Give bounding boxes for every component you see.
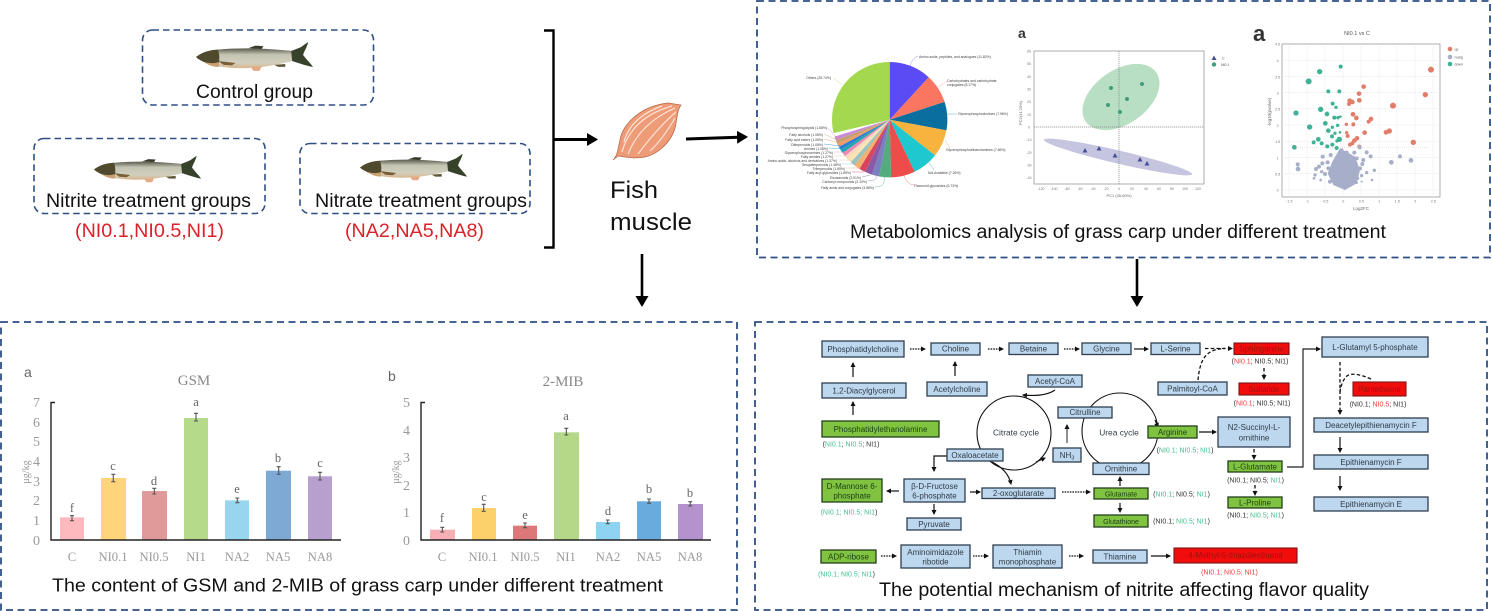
- citrate cycle: [977, 396, 1051, 470]
- box: N2-Succinyl-L-ornithine: N2-Succinyl-L-: [1228, 423, 1281, 432]
- arrow: metabolomics to mechanism: [1136, 259, 1138, 305]
- bar chart: 2-MIB: μg/kg: [391, 460, 402, 484]
- bar chart: 2-MIB: [388, 368, 711, 564]
- volcano plot: 0: [1277, 189, 1279, 193]
- box: Choline: [931, 343, 980, 355]
- PCA scatter plot: -60: [1077, 187, 1083, 191]
- bar chart: GSM: NA5: [266, 550, 290, 564]
- volcano plot: 2: [1414, 199, 1416, 203]
- bar chart: 2-MIB: NA8: [678, 550, 702, 564]
- PCA scatter plot: -100: [1050, 187, 1058, 191]
- chart title GSM: GSM: [178, 373, 210, 389]
- volcano plot: 1: [1378, 199, 1380, 203]
- pie labels: Glycerophosphoserines (1.27%): [785, 151, 833, 155]
- box: Sulfatide: [1239, 383, 1289, 395]
- label: Pantetheine groups: (NI0.1; NI0.5; NI1): [1350, 402, 1406, 408]
- box: Acetylcholine: [927, 382, 987, 396]
- PCA scatter plot: -20: [1026, 151, 1032, 155]
- bar chart: GSM: e: [234, 482, 240, 496]
- arrow: muscle to metabolomics: [686, 137, 746, 139]
- bar chart: GSM: NA2: [225, 550, 249, 564]
- box: L-Proline: L-Proline: [1239, 498, 1272, 508]
- pie labels: Sesquiterpenoids (1.48%): [802, 163, 841, 167]
- volcano legend: down: [1454, 62, 1463, 66]
- box: Glutathione: [1094, 515, 1148, 527]
- box: L-Proline: [1228, 497, 1282, 508]
- bar chart: GSM: c: [110, 459, 116, 473]
- label: Glutamate groups: (NI0.1; NI0.5; NI1): [1153, 492, 1210, 498]
- pie labels: Flavonoid glycosides (6.73%): [914, 184, 958, 188]
- bar chart: 2-MIB: f: [440, 511, 445, 525]
- label: D-Mannose groups: (NI0.1; NI0.5; NI1): [821, 510, 877, 516]
- PCA scatter plot: -40: [1090, 187, 1096, 191]
- box: 1,2-Diacylglycerol: 1,2-Diacylglycerol: [832, 386, 896, 396]
- box: Glutamate: [1094, 488, 1148, 499]
- volcano plot: 1: [1277, 156, 1279, 160]
- volcano plot: 0.5: [1275, 173, 1280, 177]
- box: L-Glutamyl 5-phosphate: L-Glutamyl 5-phosphate: [1332, 343, 1418, 352]
- label: ADP-ribose groups: (NI0.1; NI0.5; NI1): [818, 572, 875, 578]
- box: Deacetylepithienamycin F: Deacetylepithienamycin F: [1325, 421, 1417, 430]
- box: L-Glutamate: L-Glutamate: [1233, 462, 1278, 472]
- label: L-Proline groups: (NI0.1; NI0.5; NI1): [1227, 512, 1284, 520]
- box: D-Mannose 6-phosphate: phosphate: [833, 492, 871, 500]
- panel: nitrate treatment groups: [300, 144, 530, 214]
- pie labels: Fatty amides (1.27%): [801, 155, 833, 159]
- volcano plot: 1.5: [1395, 199, 1400, 203]
- box: Pyruvate: [907, 518, 961, 530]
- box: L-Glutamate: [1228, 461, 1282, 472]
- PCA scatter plot: 10: [1027, 113, 1031, 117]
- box: L-Serine: L-Serine: [1160, 344, 1191, 354]
- bar chart: 2-MIB: d: [605, 504, 612, 518]
- PCA scatter plot: -120: [1037, 187, 1045, 191]
- bar chart: GSM: a: [193, 395, 199, 409]
- volcano legend: nosig: [1454, 56, 1463, 60]
- bar chart: GSM: b: [275, 451, 281, 465]
- box: D-Mannose 6-phosphate: [822, 479, 882, 502]
- urea cycle: Urea cycle: [1099, 428, 1139, 438]
- box: Arginine: [1148, 426, 1197, 438]
- volcano plot: 4: [1277, 59, 1279, 63]
- icon: nitrate fish: [360, 154, 467, 180]
- PCA scatter plot: -80: [1064, 187, 1070, 191]
- PCA legend: NI0.1: [1221, 63, 1229, 67]
- label: Arginine groups: (NI0.1; NI0.5; NI1): [1157, 448, 1213, 454]
- box: Epithienamycin F: [1314, 455, 1428, 469]
- PCA scatter plot: 40: [1144, 187, 1148, 191]
- bar chart: 2-MIB: C: [438, 550, 446, 564]
- bar chart: 2-MIB: b: [687, 486, 693, 500]
- bar chart: GSM: 7: [33, 396, 40, 411]
- bar chart: GSM: C: [68, 550, 76, 564]
- chart title 2-MIB: 2-MIB: [543, 374, 583, 390]
- volcano plot: -1.5: [1286, 199, 1292, 203]
- pie labels: Triterpenoids (1.65%): [813, 167, 845, 171]
- panel: control group: [142, 30, 374, 105]
- pie labels: Amines (1.08%): [804, 147, 828, 151]
- PCA scatter plot: 60: [1157, 187, 1161, 191]
- box: Citrulline: [1058, 407, 1112, 418]
- bar chart: 2-MIB: NI0.1: [468, 550, 498, 564]
- pie chart: [824, 56, 957, 187]
- bar chart: 2-MIB: 2: [403, 479, 410, 494]
- volcano plot: 2.5: [1431, 199, 1436, 203]
- bar chart: 2-MIB: NI0.5: [510, 550, 540, 564]
- bar chart: GSM: 3: [33, 475, 40, 490]
- volcano plot: -log10(pvalue): [1267, 97, 1272, 126]
- pie labels: Amino acids, peptides, and analogues (11.82%): [919, 55, 991, 59]
- bar chart: GSM: d: [151, 474, 158, 488]
- bar chart: 2-MIB: 4: [403, 424, 410, 439]
- box: Ornithine: [1093, 463, 1149, 474]
- PCA scatter plot: 50: [1027, 62, 1031, 66]
- box: D-Mannose 6-phosphate: D-Mannose 6-: [827, 482, 878, 491]
- pie labels: Phosphosphingolipids (1.68%): [781, 126, 827, 130]
- box: Aminoimidazole ribotide: ribotide: [922, 558, 949, 566]
- panel: GSM and 2-MIB content: [1, 322, 737, 610]
- bar chart: GSM: NA8: [308, 550, 332, 564]
- bar chart: GSM: NI0.5: [139, 550, 169, 564]
- pie labels: Diterpenoids (1.08%): [791, 143, 823, 147]
- panel: nitrite treatment groups: [34, 138, 265, 214]
- box: Aminoimidazole ribotide: Aminoimidazole: [907, 548, 964, 557]
- bar chart: GSM: NI1: [186, 550, 206, 564]
- bar chart: 2-MIB: 3: [403, 451, 410, 466]
- box: Thiamin monophosphate: monophosphate: [999, 558, 1057, 566]
- panel: potential mechanism: [755, 322, 1487, 610]
- volcano plot: Log2FC: [1353, 206, 1370, 211]
- box: Aminoimidazole ribotide: [901, 545, 970, 568]
- bar chart: GSM: c: [317, 456, 323, 470]
- box: Epithienamycin E: [1314, 497, 1428, 511]
- label: nitrite groups: Nitrite treatment groups: [46, 191, 251, 212]
- volcano plot: 3: [1277, 91, 1279, 95]
- label: 4-Methyl groups: (NI0.1; NI0.5; NI1): [1201, 570, 1258, 576]
- box: ADP-ribose: ADP-ribose: [828, 552, 870, 562]
- pathway arrows: [853, 348, 1371, 556]
- bracket: [544, 30, 554, 248]
- PCA scatter plot: PC1 (35.60%): [1106, 193, 1132, 198]
- label: fish muscle: muscle: [610, 209, 692, 236]
- bar chart: GSM: NI0.1: [98, 550, 128, 564]
- box: Phosphatidylethanolamine: Phosphatidylethanolamine: [834, 425, 928, 434]
- box: Glycine: [1082, 343, 1131, 354]
- PCA scatter plot: 40: [1027, 75, 1031, 79]
- bar chart: GSM: 4: [33, 455, 40, 470]
- volcano plot: 4.5: [1275, 43, 1280, 47]
- pie labels: Fatty alcohols (1.08%): [789, 133, 823, 137]
- box: NH3: 3: [1071, 456, 1074, 462]
- box: Sphinganine: [1234, 343, 1289, 354]
- box: Epithienamycin E: Epithienamycin E: [1340, 500, 1402, 509]
- PCA scatter plot: 20: [1130, 187, 1134, 191]
- bar chart: 2-MIB: b: [646, 482, 652, 496]
- box: Thiamin monophosphate: [993, 545, 1062, 568]
- box: Sphinganine: Sphinganine: [1239, 344, 1284, 354]
- box: 2-oxoglutarate: 2-oxoglutarate: [993, 489, 1045, 498]
- PCA legend: C: [1222, 56, 1225, 60]
- box: 4-Methyl-5-thiazoleethanol: 4-Methyl-5-thiazoleethanol: [1188, 551, 1283, 560]
- bar chart: 2-MIB: NI1: [556, 550, 576, 564]
- volcano plot: 0: [1342, 199, 1344, 203]
- volcano plot: -0.5: [1322, 199, 1328, 203]
- volcano plot: 2.5: [1275, 108, 1280, 112]
- bar chart: GSM: 2: [33, 494, 40, 509]
- box: Deacetylepithienamycin F: [1314, 418, 1428, 432]
- box: beta-D-Fructose 6-phosphate: [904, 479, 965, 502]
- box: L-Glutamyl 5-phosphate: [1322, 337, 1428, 357]
- pie labels: Glycerophosphocholines (7.96%): [958, 112, 1008, 116]
- panel letter a: a: [24, 364, 32, 380]
- pie labels: [768, 55, 1008, 190]
- volcano plot: [1253, 21, 1463, 211]
- label: L-Glutamate groups: (NI0.1; NI0.5; NI1): [1227, 478, 1284, 484]
- pie labels: Carbonyl compounds (2.10%): [822, 180, 867, 184]
- box: ADP-ribose: [821, 550, 876, 563]
- volcano plot: 3.5: [1275, 75, 1280, 79]
- box: Glycine: Glycine: [1093, 344, 1120, 354]
- volcano plot: -1: [1306, 199, 1309, 203]
- label: fish muscle: Fish: [610, 177, 658, 204]
- label: Sphinganine groups: (NI0.1; NI0.5; NI1): [1232, 358, 1288, 366]
- pie labels: Fatty acid esters (1.08%): [785, 138, 823, 142]
- label: nitrate groups: Nitrate treatment groups: [315, 191, 527, 212]
- nitrate group codes: (NA2,NA5,NA8): [345, 221, 484, 242]
- box: N2-Succinyl-L-ornithine: ornithine: [1239, 434, 1270, 442]
- PCA scatter plot: 20: [1027, 100, 1031, 104]
- box: Sulfatide: Sulfatide: [1248, 385, 1280, 394]
- box: beta-D-Fructose 6-phosphate: 6-phosphate: [912, 492, 957, 500]
- PCA scatter plot: 30: [1027, 88, 1031, 92]
- box: Betaine: Betaine: [1020, 344, 1048, 354]
- box: Ornithine: Ornithine: [1105, 464, 1138, 474]
- icon: fish muscle: [613, 103, 681, 160]
- bar chart: GSM: μg/kg: [21, 460, 32, 484]
- box: Palmitoyl-CoA: [1158, 382, 1227, 395]
- box: Thiamine: Thiamine: [1104, 552, 1137, 562]
- volcano plot: 1.5: [1275, 140, 1280, 144]
- box: 2-oxoglutarate: [982, 488, 1055, 498]
- PCA scatter plot: 80: [1170, 187, 1174, 191]
- PCA scatter plot: PC2(31.20%): [1018, 100, 1023, 125]
- box: Thiamine: [1093, 550, 1147, 563]
- PCA legend: [1212, 56, 1229, 67]
- PCA scatter plot: -30: [1026, 164, 1032, 168]
- bar chart: 2-MIB: NA2: [596, 550, 620, 564]
- pie labels: Amino acids, alcohols and derivatives (1.37%): [768, 159, 837, 163]
- pie labels: Glycerophosphoethanolamines (7.66%): [946, 148, 1006, 152]
- volcano legend: [1448, 47, 1463, 66]
- pie labels: Fatty acyl glycosides (1.85%): [807, 171, 851, 175]
- arrow: muscle to content panel: [641, 254, 643, 305]
- label: control group: Control group: [196, 81, 313, 103]
- PCA scatter plot: 100: [1182, 187, 1188, 191]
- PCA scatter plot: 0: [1028, 126, 1030, 130]
- bar chart: GSM: [21, 364, 341, 564]
- icon: control fish: [196, 42, 313, 71]
- label: PCA panel letter: a: [1018, 25, 1026, 41]
- bar chart: GSM: 0: [33, 534, 40, 549]
- box: Palmitoyl-CoA: Palmitoyl-CoA: [1167, 384, 1218, 394]
- PCA scatter plot: -40: [1026, 176, 1032, 180]
- label: Glutathione groups: (NI0.1; NI0.5; NI1): [1153, 518, 1210, 526]
- bar chart: 2-MIB: c: [481, 490, 487, 504]
- caption: content: The content of GSM and 2-MIB of grass carp under different treatment: [52, 574, 663, 596]
- pie labels: Fatty acids and conjugates (3.88%): [821, 186, 874, 190]
- volcano title: NI0.1 vs C: [1344, 31, 1370, 37]
- panel: metabolomics: [757, 1, 1490, 258]
- arrow: bracket to muscle: [554, 138, 596, 141]
- bar chart: GSM: 5: [33, 435, 40, 450]
- pie labels: Not Available (7.26%): [928, 171, 961, 175]
- box: Thiamin monophosphate: Thiamin: [1013, 548, 1042, 557]
- box: Acetyl-CoA: Acetyl-CoA: [1035, 377, 1076, 386]
- box: Oxaloacetate: Oxaloacetate: [951, 451, 999, 460]
- box: Betaine: [1009, 343, 1058, 354]
- bar chart: 2-MIB: 5: [403, 396, 410, 411]
- box: Phosphatidylcholine: Phosphatidylcholine: [827, 345, 899, 354]
- box: 1,2-Diacylglycerol: [822, 383, 906, 398]
- PCA scatter plot: 60: [1027, 50, 1031, 54]
- box: Glutamate: Glutamate: [1105, 492, 1137, 498]
- PCA scatter plot: -20: [1103, 187, 1109, 191]
- bar chart: 2-MIB: 0: [403, 534, 410, 549]
- bar chart: 2-MIB: a: [563, 409, 569, 423]
- pie labels: Eicosanoids (2.01%): [830, 176, 861, 180]
- box: Glutathione: Glutathione: [1103, 519, 1139, 526]
- box: Acetyl-CoA: [1028, 375, 1082, 387]
- label: Sulfatide groups: (NI0.1; NI0.5; NI1): [1234, 400, 1290, 408]
- caption: metabolomics: Metabolomics analysis of grass carp under different treatment: [850, 222, 1387, 243]
- box: NH3: NH: [1060, 451, 1071, 460]
- box: 4-Methyl-5-thiazoleethanol: [1174, 548, 1297, 563]
- box: Oxaloacetate: [947, 449, 1003, 461]
- pie labels: Carbohydrates and carbohydrate: [947, 79, 997, 83]
- label: volcano panel letter: a: [1253, 21, 1266, 46]
- box: Phosphatidylcholine: [822, 341, 904, 357]
- nitrite group codes: (NI0.1,NI0.5,NI1): [75, 221, 224, 242]
- label: fish muscle: [610, 177, 692, 236]
- caption: mechanism: The potential mechanism of nitrite affecting flavor quality: [879, 579, 1369, 601]
- box: Acetylcholine: Acetylcholine: [933, 385, 981, 394]
- volcano legend: up: [1454, 48, 1458, 52]
- bar chart: 2-MIB: e: [522, 508, 528, 522]
- box: Epithienamycin F: Epithienamycin F: [1340, 458, 1402, 467]
- box: L-Serine: [1151, 343, 1200, 354]
- bar chart: GSM: 1: [33, 514, 40, 529]
- label: Phosphatidylethanolamine groups: (NI0.1; NI0.5; NI1): [823, 442, 879, 448]
- bar chart: GSM: 6: [33, 416, 40, 431]
- box: Choline: Choline: [942, 344, 970, 354]
- box: Arginine: Arginine: [1158, 428, 1188, 437]
- volcano plot: 0.5: [1359, 199, 1364, 203]
- box: N2-Succinyl-L-ornithine: [1218, 417, 1290, 447]
- PCA scatter plot: -10: [1026, 138, 1032, 142]
- pie labels: Others (28.74%): [806, 76, 831, 80]
- volcano plot: 2: [1277, 124, 1279, 128]
- PCA scatter plot: 120: [1195, 187, 1201, 191]
- box: Pantetheine: [1353, 382, 1406, 396]
- urea cycle: [1082, 393, 1158, 469]
- bar chart: 2-MIB: 1: [403, 506, 410, 521]
- panel letter b: b: [388, 368, 396, 384]
- box: NH3: [1053, 448, 1081, 462]
- icon: nitrite fish: [94, 156, 201, 182]
- box: Pantetheine: Pantetheine: [1358, 385, 1401, 394]
- PCA scatter plot: [1018, 25, 1229, 198]
- pie labels: conjugates (8.17%): [947, 83, 976, 87]
- box: Pyruvate: Pyruvate: [918, 520, 950, 529]
- box: Citrulline: Citrulline: [1069, 408, 1101, 417]
- bar chart: 2-MIB: NA5: [637, 550, 661, 564]
- box: Phosphatidylethanolamine: [822, 421, 939, 437]
- citrate cycle: Citrate cycle: [993, 428, 1039, 438]
- bar chart: GSM: f: [70, 501, 75, 515]
- PCA scatter plot: 0: [1118, 187, 1120, 191]
- box: beta-D-Fructose 6-phosphate: β-D-Fructose: [911, 482, 958, 491]
